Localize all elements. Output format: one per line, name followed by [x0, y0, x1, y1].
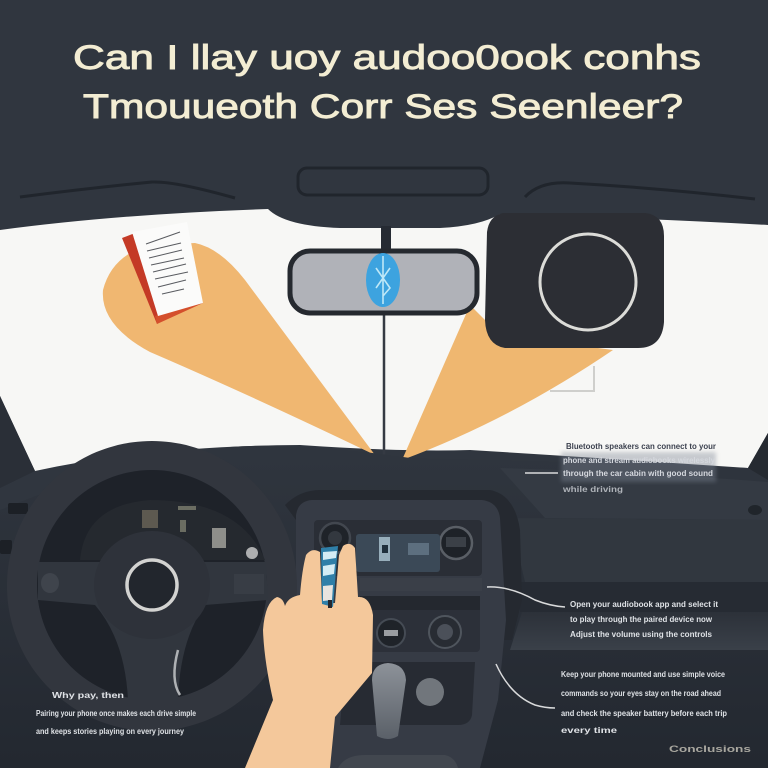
- spokes: [38, 562, 268, 700]
- callout text: lower right: commands so your eyes stay on the road ahead: [561, 688, 721, 698]
- spoke highlight: left: [41, 573, 59, 593]
- icon: audiobook: [122, 222, 203, 324]
- callout text: lower left: [36, 690, 196, 736]
- console bottom pad: [338, 755, 458, 768]
- speaker ring: [540, 234, 636, 330]
- rear-view mirror: [290, 251, 477, 313]
- bluetooth speaker: [485, 213, 664, 348]
- hand: [245, 544, 373, 768]
- callout text: middle right: Open your audiobook app and select it: [570, 599, 718, 609]
- title: Can I llay uoy audoo0ook conhs: [73, 39, 701, 77]
- infotainment screen: [356, 534, 440, 572]
- light beam: right: [402, 305, 613, 460]
- rear-view mirror stem: [383, 312, 385, 456]
- roof bulge mount: [381, 226, 391, 252]
- callout text: middle right: to play through the paired device now: [570, 614, 712, 624]
- credit text: Conclusions: [669, 744, 751, 754]
- phone in hand: [321, 546, 338, 608]
- callout text: lower left: Pairing your phone once makes each drive simple: [36, 708, 196, 718]
- hub: [94, 531, 210, 639]
- text backing: top right callout: [561, 452, 716, 482]
- shifter bay: [340, 662, 475, 725]
- icon: bluetooth oval: [366, 253, 400, 307]
- round control: [416, 678, 444, 706]
- instrument cluster: [80, 500, 265, 560]
- callout lines: [487, 473, 565, 708]
- spoke highlight: right: [234, 574, 264, 594]
- dash lower shelf: [510, 612, 768, 650]
- air vent: right: [440, 527, 472, 559]
- console arch shadow: [285, 490, 522, 640]
- dash top shelf: [500, 468, 768, 520]
- dashboard: [0, 433, 768, 768]
- callout text: top right: through the car cabin with good sound: [563, 468, 713, 478]
- spoke trim: [174, 650, 180, 695]
- dash air strip: [510, 518, 768, 582]
- window reflection outline: [550, 366, 594, 391]
- callout text: lower right: and check the speaker battery before each trip: [561, 708, 727, 718]
- callout text: middle right: [570, 599, 718, 639]
- lower control panel: [360, 596, 480, 652]
- callout text: lower left: Why pay, then: [52, 690, 124, 700]
- knob: right: [429, 616, 461, 648]
- console button row: [360, 578, 482, 591]
- upper dark band: [314, 520, 482, 576]
- steering wheel: [7, 441, 297, 731]
- hub ring: [127, 560, 177, 610]
- callout text: top right: phone and stream audiobooks wirelessly: [563, 455, 715, 465]
- windshield: [0, 209, 768, 471]
- light beam: left: [103, 243, 375, 455]
- callout text: top right: while driving: [562, 484, 623, 494]
- callout text: middle right: Adjust the volume using the controls: [570, 629, 712, 639]
- callout text: lower right: [561, 669, 727, 735]
- callout text: top right: [562, 441, 717, 494]
- wheel opening: [37, 470, 267, 700]
- center console: [296, 500, 506, 768]
- title: [73, 39, 701, 126]
- gear shifter: [372, 663, 406, 739]
- left pillar: [0, 396, 35, 488]
- title: Tmouueoth Corr Ses Seenleer?: [83, 88, 683, 126]
- left vent: [0, 503, 28, 554]
- dash vent mark: [748, 505, 762, 515]
- knob: left: [377, 619, 405, 647]
- callout text: top right: Bluetooth speakers can connect to your: [566, 441, 717, 451]
- dash dark strip: [520, 582, 768, 612]
- air vent: left: [320, 523, 350, 553]
- callout text: lower right: Keep your phone mounted and use simple voice: [561, 669, 725, 679]
- callout text: lower right: every time: [561, 725, 617, 735]
- callout text: lower left: and keeps stories playing on every journey: [36, 726, 184, 736]
- panel dark header: [360, 596, 480, 610]
- roof console and visor lines: [20, 168, 755, 199]
- right pillar: [748, 433, 768, 480]
